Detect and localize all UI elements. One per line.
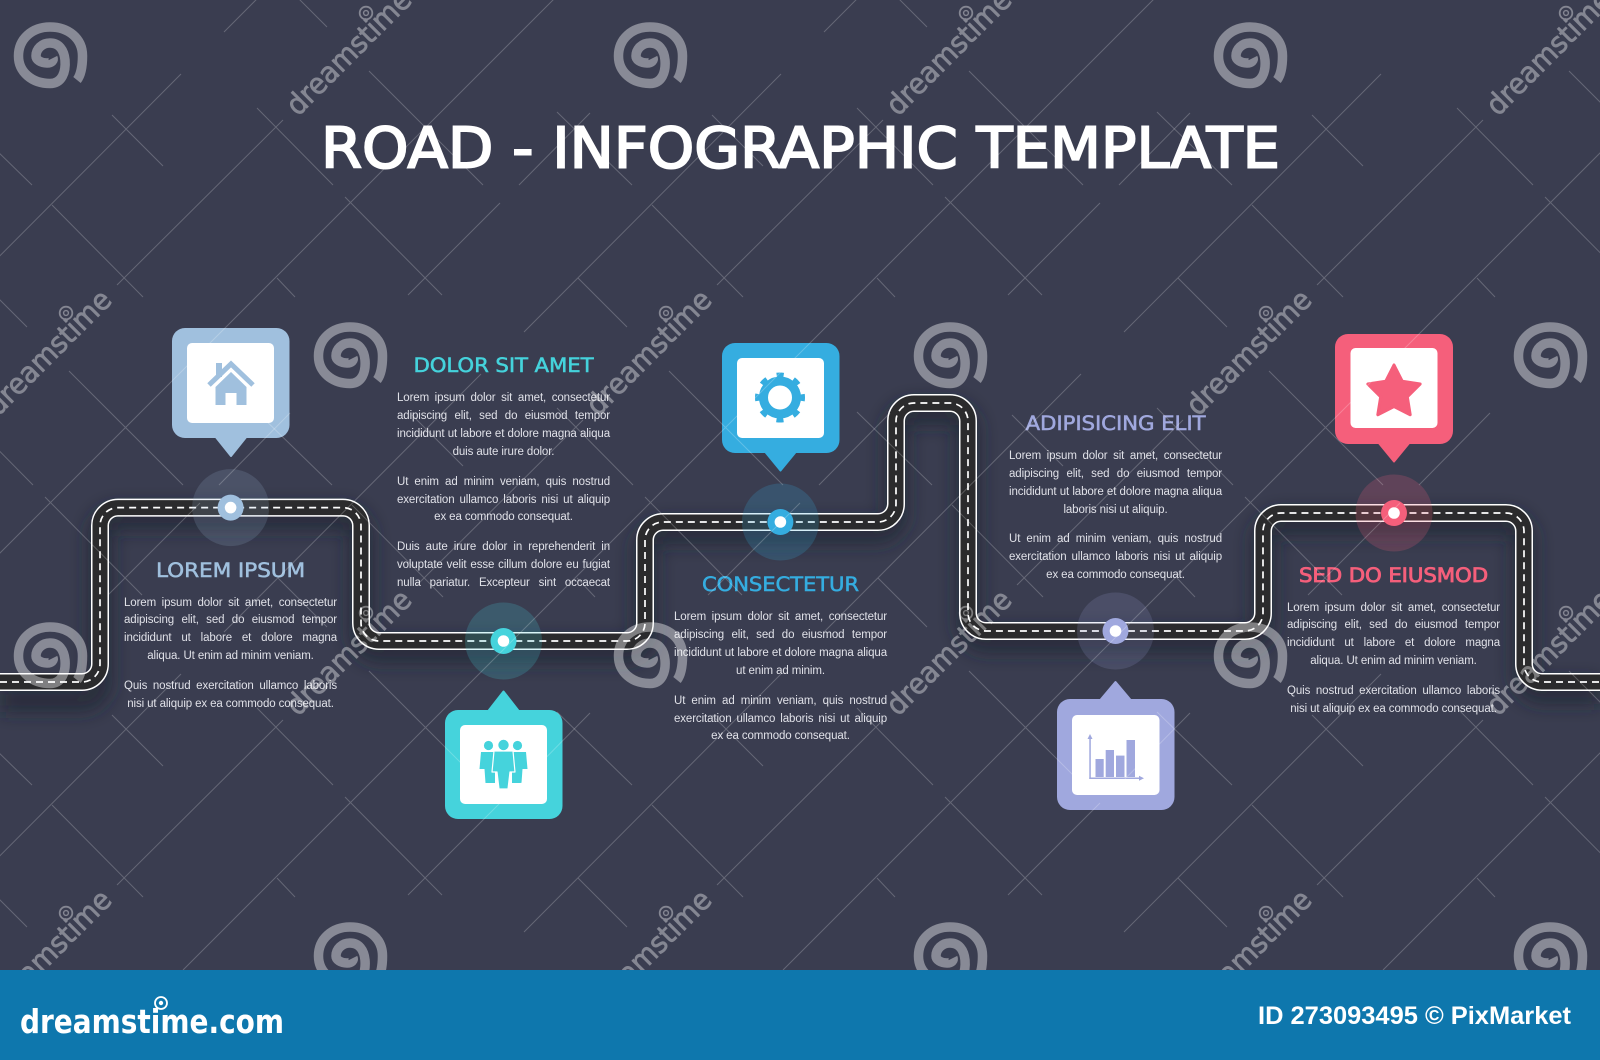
text block: dolor sit amet: Lorem ipsum dolor sit amet, consectetur: [397, 392, 610, 404]
watermark: dreamstime text: dreamstime: [579, 283, 718, 422]
step 2 marker: [465, 602, 542, 680]
text block: adipisicing elit: incididunt ut labore et dolore magna aliqua: [1009, 486, 1222, 498]
heading: dolor sit amet: DOLOR SIT AMET: [414, 354, 594, 377]
text block: dolor sit amet: duis aute irure dolor.: [453, 446, 554, 458]
text block: consectetur: exercitation ullamco laboris nisi ut aliquip: [674, 713, 887, 725]
road: [0, 403, 1600, 682]
text block: lorem ipsum: Lorem ipsum dolor sit amet, consectetur: [124, 597, 337, 609]
text block: sed do eiusmod: Lorem ipsum dolor sit amet, consectetur: [1287, 602, 1500, 614]
text block: sed do eiusmod: nisi ut aliquip ex ea commodo consequat.: [1290, 703, 1497, 715]
text block: consectetur: [674, 573, 888, 742]
text block: adipisicing elit: laboris nisi ut aliquip.: [1063, 504, 1168, 516]
text block: sed do eiusmod: [1287, 564, 1500, 715]
icon: people: [480, 740, 528, 789]
text block: adipisicing elit: [1009, 412, 1222, 581]
text block: lorem ipsum: adipiscing elit, sed do eiusmod tempor: [124, 614, 337, 626]
footer logo: dreamstime.com: [20, 1002, 284, 1041]
title: ROAD - INFOGRAPHIC TEMPLATE: [321, 116, 1280, 182]
icon: gear: [758, 375, 802, 420]
step 5 pin: star: [1335, 334, 1453, 462]
footer bar: [0, 970, 1600, 1060]
text block: lorem ipsum: aliqua. Ut enim ad minim veniam.: [147, 650, 314, 662]
watermark: dreamstime text: dreamstime: [1179, 283, 1318, 422]
text block: dolor sit amet: incididunt ut labore et dolore magna aliqua: [397, 428, 610, 440]
text block: dolor sit amet: voluptate velit esse cillum dolore eu fugiat: [397, 559, 610, 571]
step 5 marker: [1356, 474, 1432, 552]
text block: lorem ipsum: nisi ut aliquip ex ea commodo consequat.: [127, 698, 334, 710]
text block: consectetur: Ut enim ad minim veniam, quis nostrud: [674, 695, 887, 707]
text block: lorem ipsum: [124, 559, 338, 710]
text block: lorem ipsum: Quis nostrud exercitation ullamco laboris: [124, 680, 337, 692]
heading: sed do eiusmod: SED DO EIUSMOD: [1299, 564, 1488, 587]
text block: consectetur: ut enim ad minim.: [736, 665, 825, 677]
icon: star: [1368, 365, 1420, 415]
text block: consectetur: Lorem ipsum dolor sit amet, consectetur: [674, 611, 887, 623]
watermark: dreamstime text: dreamstime: [1179, 883, 1318, 1022]
text block: lorem ipsum: incididunt ut labore et dolore magna: [124, 632, 337, 644]
text block: dolor sit amet: Duis aute irure dolor in reprehenderit in: [397, 541, 610, 553]
step 4 marker: [1077, 592, 1154, 670]
text block: sed do eiusmod: aliqua. Ut enim ad minim veniam.: [1310, 655, 1477, 667]
heading: adipisicing elit: ADIPISICING ELIT: [1026, 412, 1206, 435]
heading: lorem ipsum: LOREM IPSUM: [156, 559, 305, 582]
text block: adipisicing elit: ex ea commodo consequat.: [1046, 569, 1185, 581]
text block: adipisicing elit: Ut enim ad minim veniam, quis nostrud: [1009, 533, 1222, 545]
text block: consectetur: ex ea commodo consequat.: [711, 730, 850, 742]
watermark: dreamstime text: dreamstime: [579, 883, 718, 1022]
step 1 pin: home: [172, 328, 290, 456]
text block: adipisicing elit: adipiscing elit, sed do eiusmod tempor: [1009, 468, 1222, 480]
text block: consectetur: adipiscing elit, sed do eiusmod tempor: [674, 629, 887, 641]
text block: sed do eiusmod: Quis nostrud exercitation ullamco laboris: [1287, 685, 1500, 697]
icon: house: [209, 363, 253, 405]
step 3 marker: [742, 484, 819, 560]
text block: dolor sit amet: Ut enim ad minim veniam, quis nostrud: [397, 476, 610, 488]
text block: adipisicing elit: Lorem ipsum dolor sit amet, consectetur: [1009, 450, 1222, 462]
step 2 pin: team: [445, 692, 562, 819]
icon: bar chart: [1088, 734, 1144, 781]
text block: dolor sit amet: nulla pariatur. Excepteur sint occaecat: [397, 577, 610, 589]
text block: adipisicing elit: exercitation ullamco laboris nisi ut aliquip: [1009, 551, 1222, 563]
text block: dolor sit amet: [397, 354, 610, 589]
text block: dolor sit amet: ex ea commodo consequat.: [434, 511, 573, 523]
step 1 marker: [192, 469, 269, 546]
footer credit: ID 273093495 © PixMarket: [1258, 1002, 1572, 1030]
watermark: dreamstime text: dreamstime: [279, 583, 418, 722]
text block: dolor sit amet: exercitation ullamco laboris nisi ut aliquip: [397, 494, 610, 506]
text block: consectetur: incididunt ut labore et dolore magna aliqua: [674, 647, 887, 659]
text block: sed do eiusmod: adipiscing elit, sed do eiusmod tempor: [1287, 619, 1500, 631]
watermark: dreamstime text: dreamstime: [879, 583, 1018, 722]
text block: dolor sit amet: adipiscing elit, sed do eiusmod tempor: [397, 410, 610, 422]
step 3 pin: gear: [722, 343, 840, 470]
road shadow: [0, 413, 1600, 700]
heading: consectetur: CONSECTETUR: [702, 573, 859, 596]
text block: sed do eiusmod: incididunt ut labore et dolore magna: [1287, 637, 1500, 649]
step 4 pin: chart: [1057, 682, 1174, 810]
